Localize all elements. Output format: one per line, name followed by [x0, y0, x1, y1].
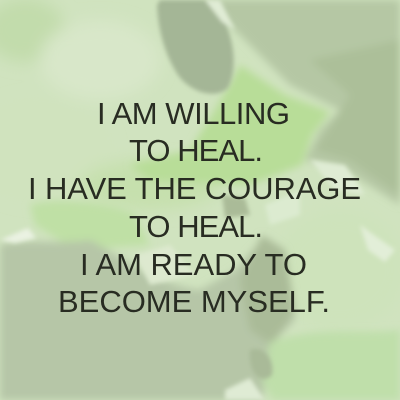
- text line 3: I HAVE THE COURAGE: [28, 171, 361, 206]
- dark grey-green wash: [157, 0, 234, 94]
- text line 2: TO HEAL.: [129, 133, 263, 168]
- text line 1: I AM WILLING: [97, 96, 290, 131]
- text line 6: BECOME MYSELF.: [58, 284, 330, 319]
- text line 5: I AM READY TO: [80, 247, 307, 282]
- text line 4: TO HEAL.: [129, 209, 263, 244]
